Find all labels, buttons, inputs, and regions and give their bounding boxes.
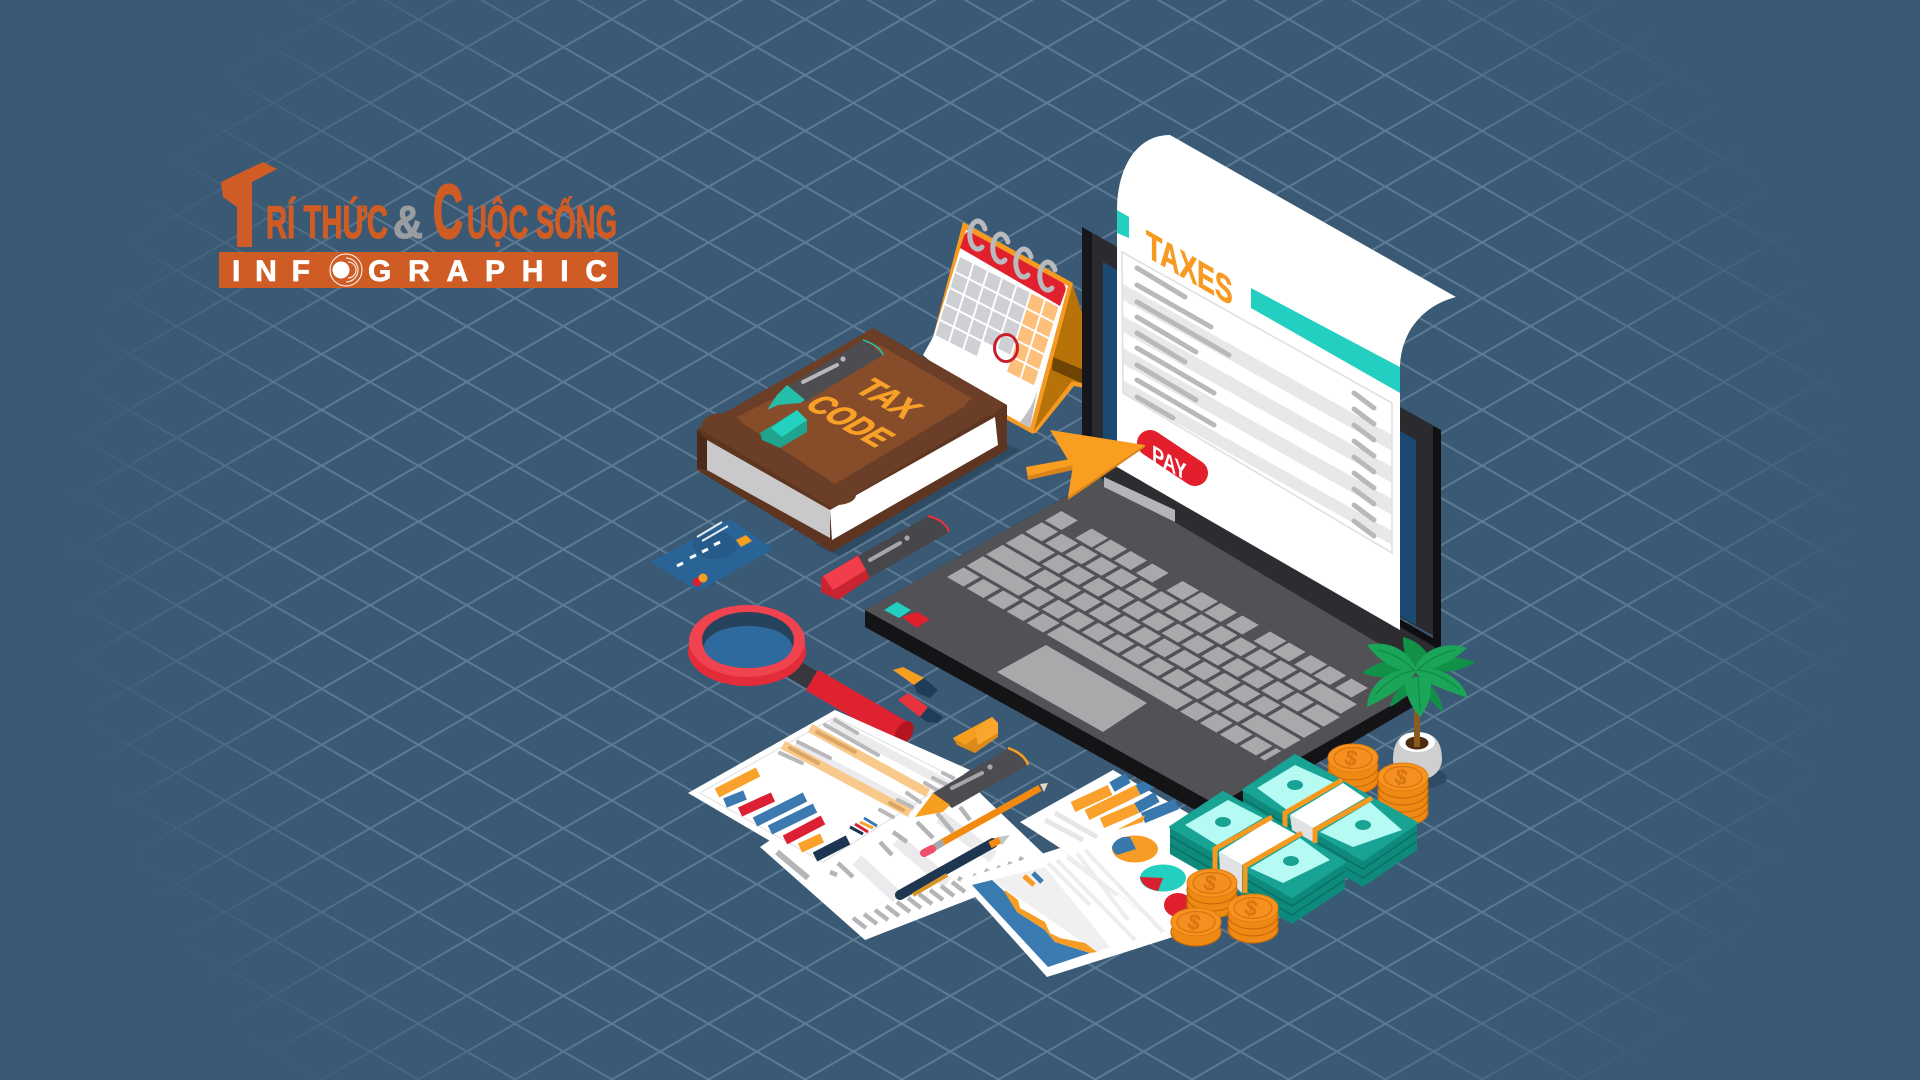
icon: plant pot (1393, 732, 1447, 788)
coin stacks in front: $ (1242, 894, 1260, 922)
icon: pen (900, 835, 1010, 895)
logo wordmark: RÍ THỨC (266, 196, 388, 248)
logo wordmark: & (393, 196, 423, 248)
front leaves (1367, 644, 1468, 717)
document: area chart (960, 848, 1173, 977)
laptop screen (1082, 227, 1441, 650)
area chart (992, 867, 1110, 952)
laptop base (865, 462, 1441, 822)
icon: orange marker (915, 748, 1028, 817)
coin stacks behind money: $ (1392, 763, 1410, 791)
calendar date circle (994, 334, 1018, 362)
trackpad (997, 645, 1147, 732)
arrow cursor (1026, 430, 1145, 500)
highlighted rows (783, 728, 928, 813)
laptop buttons (884, 602, 930, 628)
book pages (707, 440, 830, 538)
calendar grid (938, 264, 1056, 378)
laptop (865, 227, 1441, 822)
coin stacks in front: $ (1201, 869, 1219, 897)
pie chart red (1164, 893, 1192, 917)
document: bar chart report (688, 710, 970, 872)
front bundle (1170, 792, 1345, 924)
icon: palm plant (1362, 637, 1475, 747)
icon: red marker (821, 516, 949, 600)
heading: TAXES: TAXES (1146, 223, 1233, 315)
table bands (857, 817, 993, 897)
icon: pencil (924, 783, 1048, 853)
back leaves (1362, 637, 1475, 712)
book: tax code (697, 328, 1007, 552)
handle (790, 667, 812, 680)
keyboard (955, 516, 1371, 756)
speaker (1104, 477, 1175, 522)
logo banner (219, 252, 618, 288)
pay button: PAY (1152, 440, 1187, 487)
pale rows (795, 722, 958, 808)
icon: teal highlighter (760, 340, 883, 448)
tax table (1122, 252, 1392, 553)
document: table page (760, 770, 1050, 940)
coin stacks in front: $ (1185, 908, 1203, 936)
logo wordmark: C (433, 170, 463, 255)
calendar rings (970, 221, 1055, 290)
legend (850, 818, 877, 834)
pie chart orange (1112, 836, 1158, 862)
logo wordmark: UỘC SỐNG (467, 196, 617, 248)
calendar header (960, 232, 1066, 306)
coin stacks behind money (1328, 744, 1428, 826)
logo wordmark (266, 170, 617, 255)
teal bar (1251, 288, 1400, 393)
logo banner: GRAPHIC (368, 255, 607, 288)
book: tax code: CODE (796, 389, 904, 452)
book shadow (815, 440, 1020, 556)
logo T mark (221, 162, 277, 247)
icon: small clips and erasers (893, 667, 998, 753)
book cover (698, 328, 1006, 508)
calendar stand (1032, 283, 1084, 433)
bars (717, 772, 848, 857)
stacked bars (1073, 778, 1177, 823)
chart legend (1024, 876, 1034, 885)
text lines (1048, 850, 1163, 940)
coin stacks in front (1171, 869, 1278, 946)
pie chart teal (1140, 864, 1186, 892)
tax document on screen (1117, 135, 1456, 630)
icon: credit card (653, 520, 772, 590)
teal tab (1117, 210, 1129, 238)
table row ticks (777, 807, 1023, 928)
coin stacks behind money: $ (1342, 744, 1360, 772)
logo banner: INF (232, 255, 310, 288)
money stacks (1170, 755, 1417, 924)
calendar (923, 221, 1084, 434)
icon: magnifying glass (688, 605, 917, 748)
book title: TAX (846, 373, 932, 423)
logo: Tri thức & Cuộc sống Infographic (219, 162, 618, 288)
back bundle (1243, 755, 1417, 887)
document: chart page behind laptop (1020, 770, 1200, 937)
